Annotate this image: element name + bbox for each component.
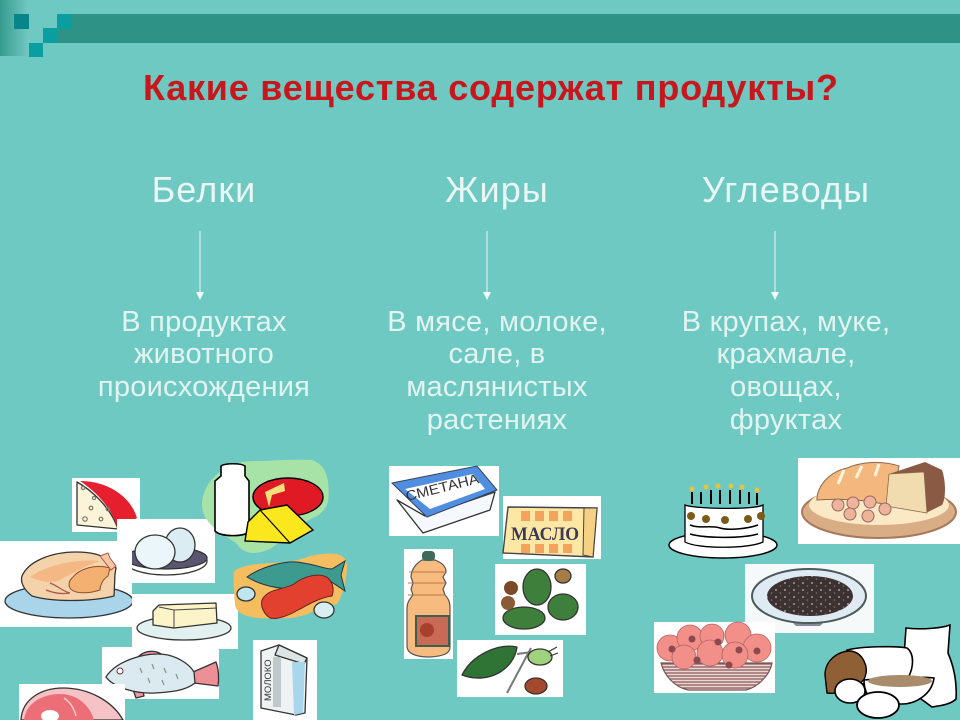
icon: dairy and bread (825, 625, 956, 718)
text: углеводы: овощах, (730, 371, 842, 403)
icon: hazelnut leaves (495, 564, 586, 635)
title: Какие вещества содержат продукты? (143, 67, 838, 108)
text: белки: животного (134, 338, 274, 370)
column: углеводы (682, 169, 890, 436)
text: углеводы: крахмале, (717, 338, 855, 370)
heading: жиры: Жиры (445, 169, 549, 210)
icon: eggs (117, 519, 215, 583)
text: углеводы (682, 306, 890, 436)
heading: углеводы: Углеводы (702, 169, 870, 210)
text: белки: В продуктах (121, 306, 287, 338)
icon: chicken on plate (0, 541, 133, 627)
text: жиры: сале, в (449, 338, 545, 370)
icon: cheese wedge (72, 478, 140, 532)
text: белки (98, 306, 310, 403)
icon: fish (102, 647, 219, 699)
icon: bread basket (798, 458, 960, 544)
icon: plate of grains (745, 564, 874, 633)
column: жиры (387, 169, 607, 436)
icon: milk carton: МОЛОКО (263, 659, 274, 701)
icon: sour cream tub: СМЕТАНА (404, 470, 481, 504)
arrow: углеводы (771, 231, 779, 300)
icon: butter on plate (132, 594, 238, 649)
icon: meat (19, 684, 125, 720)
icon: milk carton (253, 640, 317, 720)
text: углеводы: фруктах (730, 404, 843, 436)
text: жиры: растениях (427, 404, 568, 436)
icon: birthday cake (669, 484, 777, 558)
icon: sour cream tub (389, 466, 499, 536)
icon: seafood (234, 554, 347, 619)
text: белки: происхождения (98, 371, 310, 403)
icon: hazelnut branch (457, 640, 563, 697)
icon: butter pack: МАСЛО (511, 524, 579, 545)
icon: basket of flowers (654, 622, 775, 693)
column: белки (98, 169, 310, 403)
icon: butter pack (503, 496, 601, 559)
text: жиры (387, 306, 607, 436)
text: жиры: маслянистых (406, 371, 588, 403)
arrow: жиры (483, 231, 491, 300)
icon: milk bottle and cheeses (202, 460, 329, 553)
header decoration (0, 0, 960, 57)
icon: oil bottle (404, 549, 453, 659)
arrow: белки (196, 231, 204, 300)
text: жиры: В мясе, молоке, (387, 306, 607, 338)
text: углеводы: В крупах, муке, (682, 306, 890, 338)
heading: белки: Белки (152, 169, 256, 210)
